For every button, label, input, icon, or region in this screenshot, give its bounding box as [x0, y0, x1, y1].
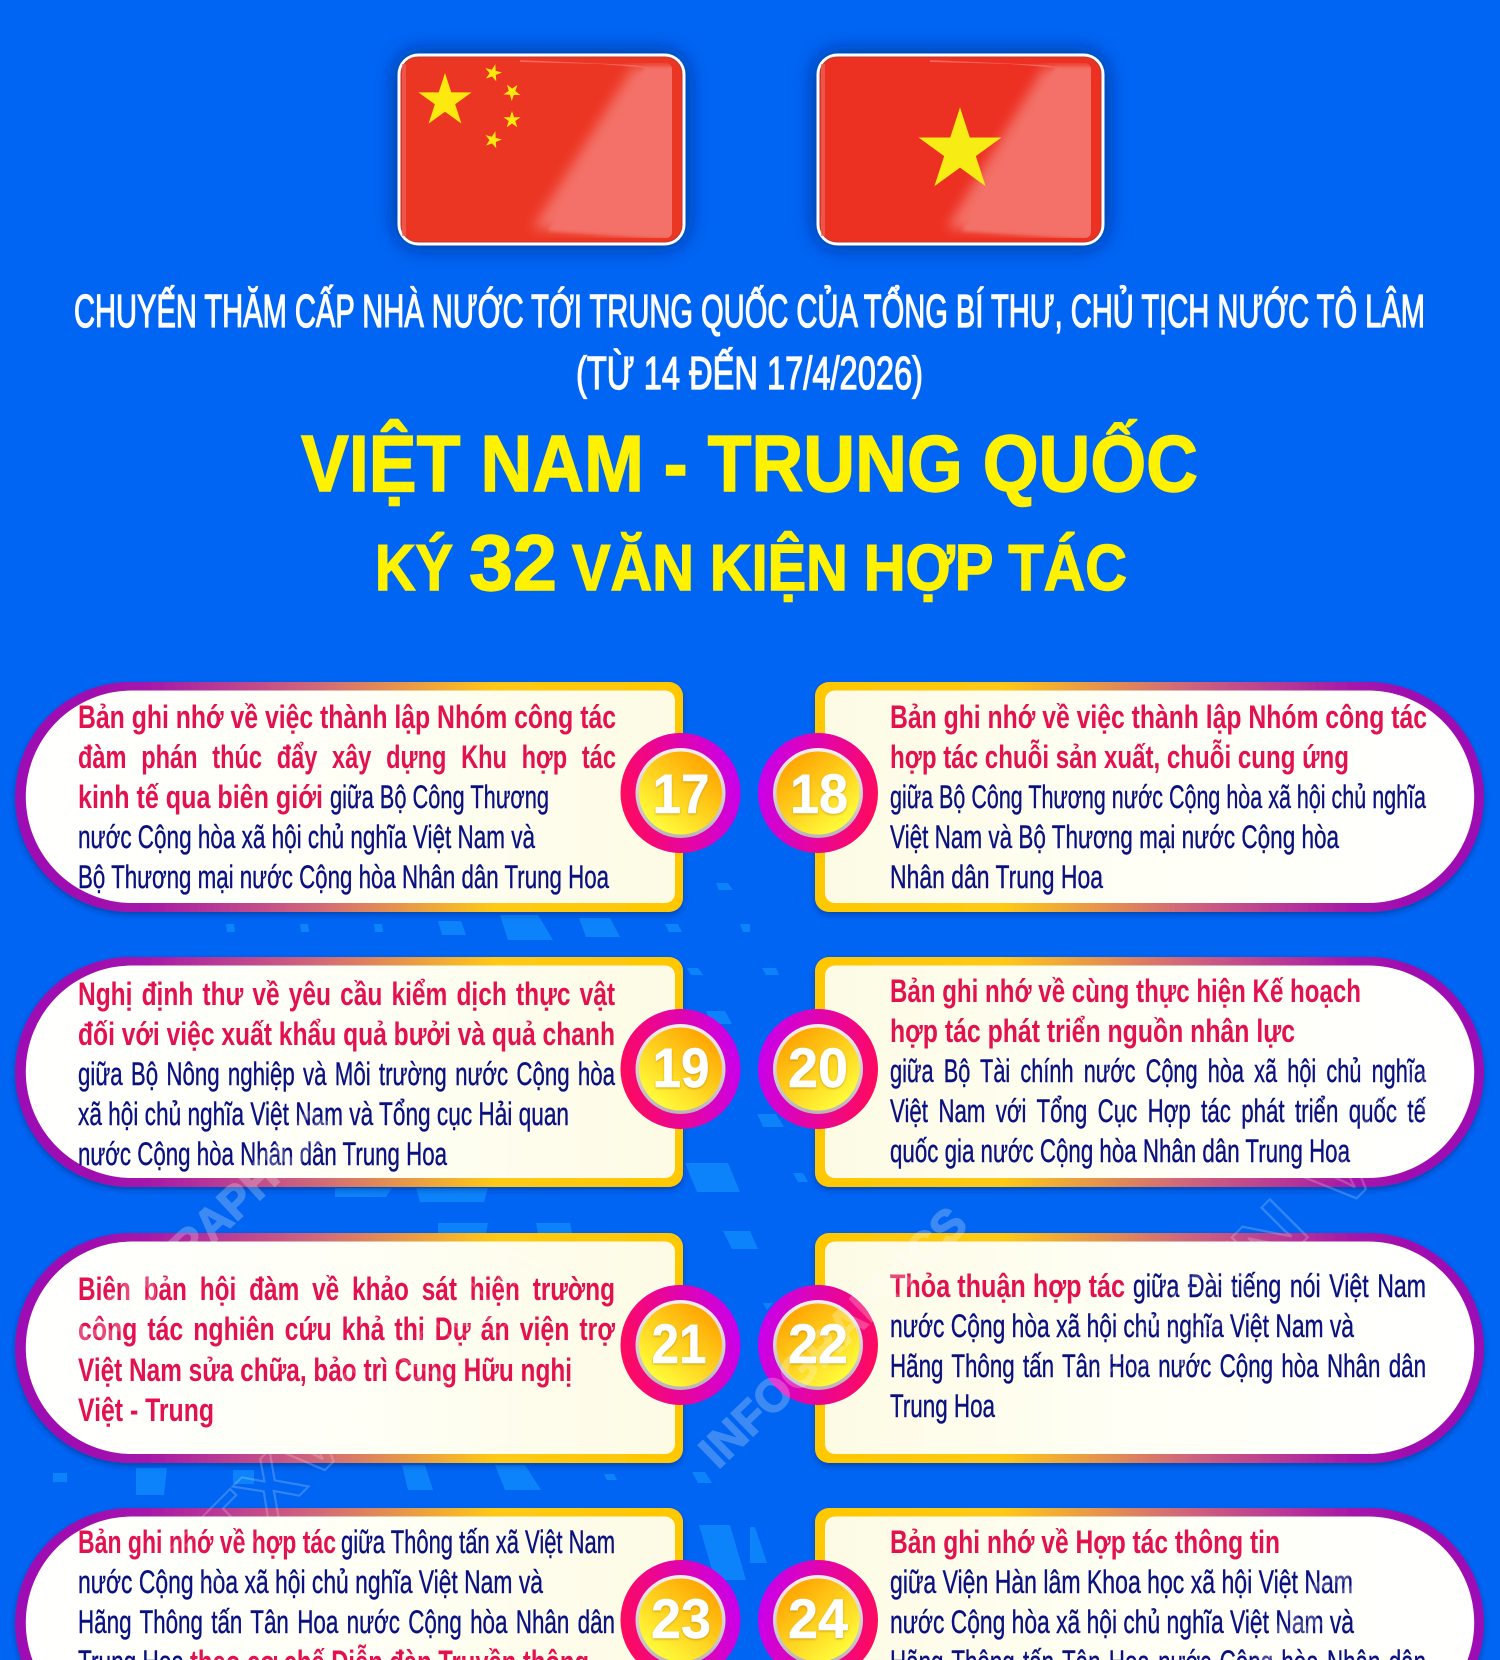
panel: document 24: Bản ghi nhớ về Hợp tác thông tin [890, 1524, 1280, 1560]
panel: document 20 [758, 957, 1484, 1187]
watermarks [55, 1030, 1486, 1660]
number badge 19: 19 [652, 1036, 710, 1099]
panel: document 22: Thỏa thuận hợp tác [890, 1268, 1125, 1304]
flag: Vietnam [816, 54, 1109, 246]
panel: document 23 [15, 1508, 741, 1660]
watermarks: INFOGRAPHICS [55, 1098, 343, 1371]
number badge 21: 21 [652, 1312, 706, 1375]
subtitle line 2: dates: (TỪ 14 ĐẾN 17/4/2026) [576, 347, 923, 399]
panel: document 19: xã hội chủ nghĩa Việt Nam và Tổng cục Hải quan [78, 1096, 569, 1132]
panel: document 21: Việt - Trung [78, 1392, 214, 1428]
number badge 22: 22 [788, 1312, 848, 1375]
panel: document 17: Bản ghi nhớ về việc thành lập Nhóm công tác [78, 699, 616, 735]
panel: document 23: giữa Thông tấn xã Việt Nam [341, 1524, 615, 1560]
watermarks: TTXVN [145, 1352, 405, 1612]
panel: document 18: Nhân dân Trung Hoa [890, 859, 1103, 895]
panel: document 22 [758, 1233, 1484, 1463]
panel: document 20: Bản ghi nhớ về cùng thực hiện Kế hoạch [890, 973, 1361, 1009]
panel: document 19 [15, 957, 741, 1187]
main title: VIỆT NAM - TRUNG QUỐC [301, 419, 1198, 508]
panel: document 21 [15, 1233, 741, 1463]
watermarks: INFOGRAPHICS [689, 1197, 977, 1477]
panel: document 19: giữa Bộ Nông nghiệp và Môi trường nước Cộng hòa [78, 1056, 615, 1092]
panel: document 19: Nghị định thư về yêu cầu kiểm dịch thực vật [78, 976, 615, 1012]
number badge 23 [620, 1560, 740, 1660]
secondary title [375, 518, 1127, 607]
panel: document 23: Hãng Thông tấn Tân Hoa nước Cộng hòa Nhân dân [78, 1604, 615, 1640]
watermarks: TTXVN [1050, 1183, 1324, 1457]
number badge 24 [758, 1560, 878, 1660]
panel: document 17: giữa Bộ Công Thương [330, 779, 549, 815]
number badge 21 [620, 1285, 740, 1405]
panel: document 24 [758, 1508, 1484, 1660]
panel: document 17 [15, 682, 741, 912]
number badge 18: 18 [790, 762, 848, 825]
panel: document 18: hợp tác chuỗi sản xuất, chuỗi cung ứng [890, 739, 1349, 775]
panel: document 17: nước Cộng hòa xã hội chủ nghĩa Việt Nam và [78, 819, 535, 855]
panel: document 20: hợp tác phát triển nguồn nhân lực [890, 1013, 1295, 1049]
number badge 20: 20 [788, 1036, 848, 1099]
number badge 19 [620, 1009, 740, 1129]
panel: document 22: Trung Hoa [890, 1388, 995, 1424]
number badge 20 [758, 1009, 878, 1129]
panel: document 19: nước Cộng hòa Nhân dân Trung Hoa [78, 1136, 447, 1172]
panel: document 17: đàm phán thúc đẩy xây dựng Khu hợp tác [78, 739, 616, 775]
number badge 17: 17 [652, 762, 710, 825]
panel: document 21: Việt Nam sửa chữa, bảo trì Cung Hữu nghị [78, 1352, 572, 1388]
number badge 18 [758, 733, 878, 853]
number badge 22 [758, 1285, 878, 1405]
number badge 24: 24 [788, 1587, 848, 1650]
panel: document 23: Bản ghi nhớ về hợp tác [78, 1524, 336, 1560]
number badge 17 [620, 733, 740, 853]
watermarks: VNA [1290, 1030, 1486, 1227]
panel: document 23: nước Cộng hòa xã hội chủ nghĩa Việt Nam và [78, 1564, 543, 1600]
secondary title: 32 [469, 518, 557, 607]
panel: document 17: kinh tế qua biên giới [78, 779, 323, 815]
background pattern: light blue tiles [53, 883, 808, 1580]
panel: document 18 [758, 682, 1484, 912]
panel: document 19: đối với việc xuất khẩu quả bưởi và quả chanh [78, 1016, 615, 1052]
secondary title: KÝ [375, 531, 453, 604]
panel: document 21: công tác nghiên cứu khả thi Dự án viện trợ [78, 1311, 615, 1347]
secondary title: VĂN KIỆN HỢP TÁC [572, 531, 1127, 604]
panel: document 17: Bộ Thương mại nước Cộng hòa Nhân dân Trung Hoa [78, 859, 609, 895]
panel: document 21: Biên bản hội đàm về khảo sát hiện trường [78, 1271, 615, 1307]
number badge 23: 23 [651, 1587, 711, 1650]
watermarks: VNA [375, 1220, 571, 1417]
flag: China [398, 54, 690, 246]
